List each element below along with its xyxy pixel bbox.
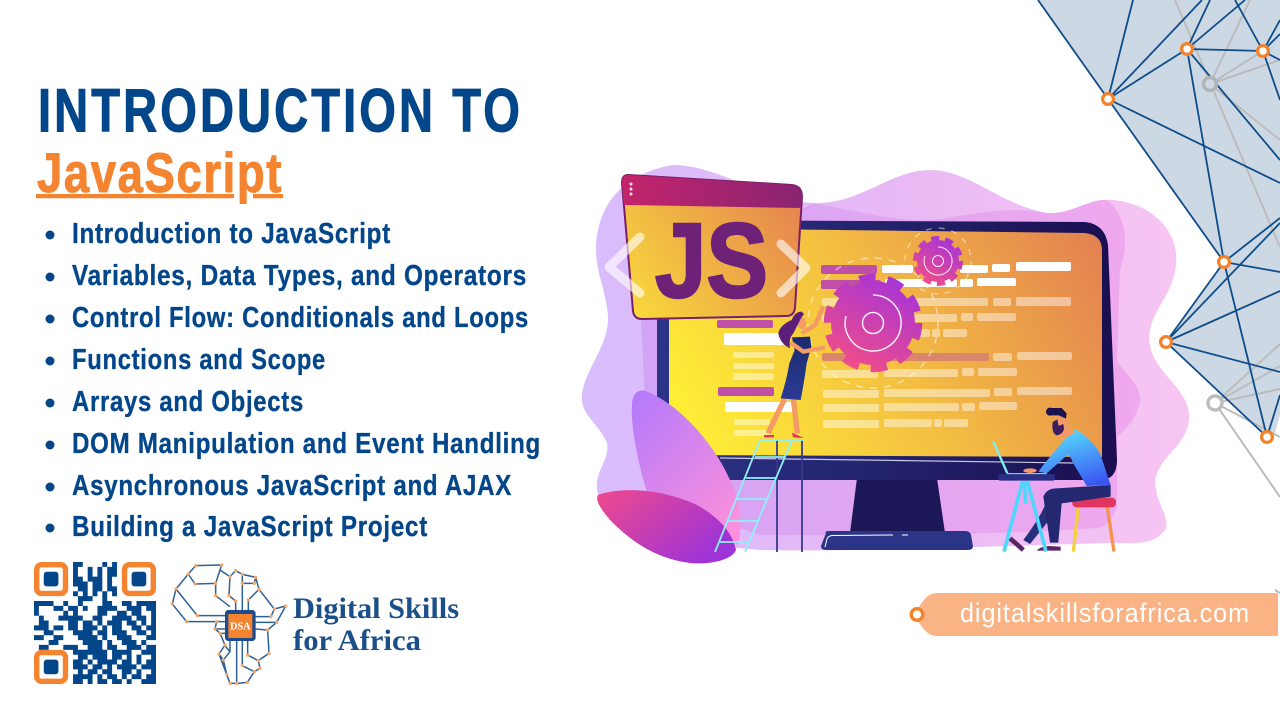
website tag bbox=[911, 593, 1278, 636]
bullet list of topics: DOM Manipulation and Event Handling bbox=[72, 428, 541, 460]
ladder bbox=[715, 440, 804, 552]
bullet list of topics: Control Flow: Conditionals and Loops bbox=[72, 302, 529, 334]
bullet list of topics: Introduction to JavaScript bbox=[72, 218, 391, 250]
code brackets bbox=[609, 237, 806, 293]
website tag: digitalskillsforafrica.com bbox=[960, 598, 1250, 628]
small gear bbox=[905, 228, 971, 294]
QR code bbox=[34, 564, 156, 682]
bullet list of topics: Functions and Scope bbox=[72, 344, 326, 376]
large gear bbox=[808, 258, 938, 388]
logo wordmark bbox=[293, 592, 459, 657]
title: JavaScript bbox=[37, 141, 283, 204]
bullet list of topics: Arrays and Objects bbox=[72, 386, 304, 418]
background blobs bbox=[582, 165, 1189, 550]
man at laptop bbox=[993, 408, 1116, 552]
monitor stand and base bbox=[821, 478, 973, 550]
logo wordmark: for Africa bbox=[293, 624, 421, 657]
title bbox=[36, 76, 523, 204]
code lines on screen bbox=[717, 262, 1072, 436]
JS code window bbox=[622, 175, 802, 320]
logo: Africa circuit map: DSA bbox=[230, 622, 251, 633]
monitor frame and screen bbox=[657, 220, 1117, 480]
illustration: developers building JavaScript bbox=[582, 165, 1189, 563]
logo wordmark: Digital Skills bbox=[293, 592, 459, 625]
background network: top and right corner bbox=[1038, 0, 1280, 593]
bullet list of topics: Variables, Data Types, and Operators bbox=[72, 260, 527, 292]
bullet list of topics bbox=[46, 218, 541, 543]
JS code window: JS bbox=[655, 202, 768, 320]
leaves bbox=[597, 391, 740, 563]
logo: Africa circuit map bbox=[171, 563, 287, 685]
bullet list of topics: Asynchronous JavaScript and AJAX bbox=[72, 470, 512, 502]
title: INTRODUCTION TO bbox=[38, 76, 523, 144]
woman figure bbox=[764, 307, 825, 438]
bullet list of topics: Building a JavaScript Project bbox=[72, 511, 428, 543]
